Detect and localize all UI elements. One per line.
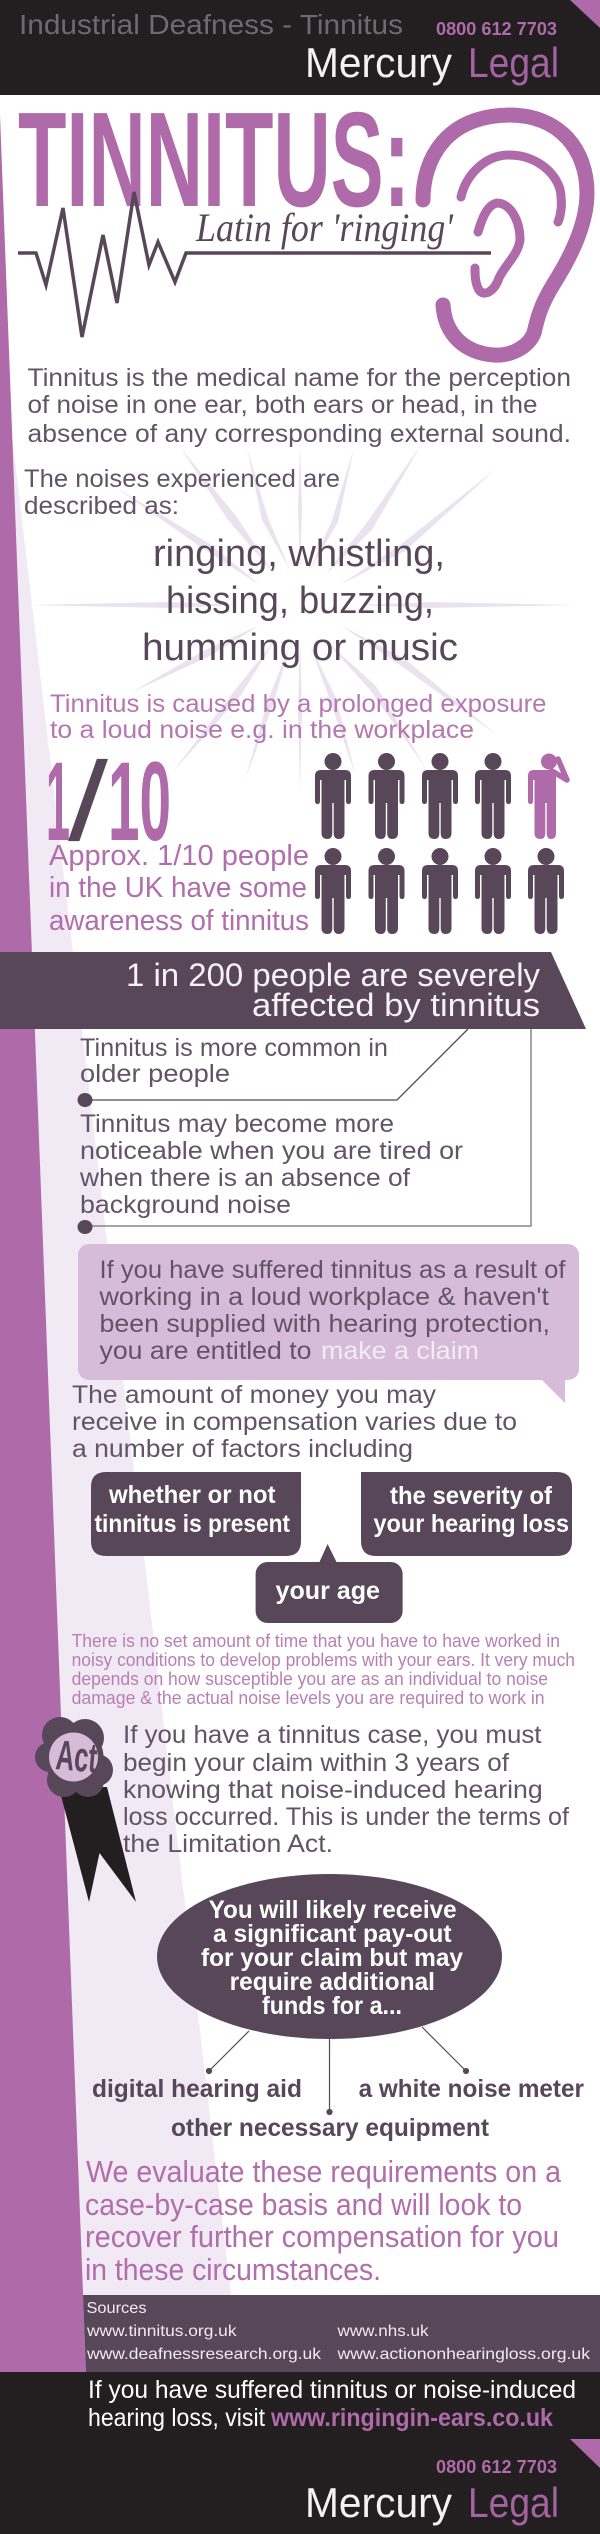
connector: age callout (78, 1029, 468, 1107)
statistic: 1/10: 1 (46, 739, 70, 864)
text block: limitation act: If you have a tinnitus case, you must (123, 1721, 542, 1749)
pictogram: ten people (315, 753, 567, 934)
text block: list of noises: hissing, buzzing, (166, 580, 434, 622)
subtitle: Latin for 'ringing' (195, 205, 454, 250)
text block: list of noises (142, 533, 458, 669)
icon: pulse line (18, 192, 491, 337)
panel: sources: www.tinnitus.org.uk (86, 2323, 238, 2340)
label: digital hearing aid: digital hearing aid (92, 2075, 302, 2103)
top header bar: 0800 612 7703 (436, 19, 557, 39)
text block: definition: absence of any corresponding external sound. (28, 420, 571, 448)
text block: compensation: a number of factors including (72, 1435, 413, 1463)
text block: older people (80, 1034, 388, 1088)
label: other equipment: other necessary equipment (171, 2114, 490, 2142)
speech bubble: make a claim: working in a loud workplace & haven't (98, 1283, 549, 1311)
text block: awareness: in the UK have some (49, 872, 307, 904)
text block: more noticeable (79, 1110, 463, 1219)
ellipse: significant pay-out: funds for a... (262, 1992, 402, 2020)
panel: sources: www.nhs.uk (336, 2323, 430, 2340)
label: white noise meter: a white noise meter (359, 2075, 584, 2103)
text block: list of noises: humming or music (142, 627, 458, 669)
starburst rays (29, 445, 578, 790)
text block: more noticeable: when there is an absence of (79, 1164, 410, 1192)
connector: noticeable callout (78, 1029, 531, 1234)
text block: no set time: damage & the actual noise levels you are required to work in (72, 1688, 545, 1708)
text block: no set time: There is no set amount of time that you have to have worked in (72, 1631, 560, 1651)
text block: case-by-case: case-by-case basis and will look to (85, 2187, 522, 2222)
text block: more noticeable: background noise (80, 1191, 291, 1219)
footer bar: 0800 612 7703 (436, 2457, 557, 2477)
footer bar: www.ringingin-ears.co.uk (270, 2404, 553, 2432)
ellipse: significant pay-out (157, 1874, 502, 2039)
icon: Act ribbon badge (35, 1717, 136, 1902)
ellipse: significant pay-out: You will likely receive (209, 1896, 457, 1924)
speech bubble: make a claim: make a claim (321, 1337, 479, 1365)
footer bar: hearing loss, visit (88, 2404, 265, 2432)
text block: more noticeable: noticeable when you are tired or (80, 1137, 463, 1165)
panel: sources (83, 2295, 600, 2372)
text block: case-by-case: recover further compensation for you (85, 2219, 559, 2254)
text block: case-by-case: in these circumstances. (85, 2252, 381, 2287)
text block: list of noises: ringing, whistling, (153, 533, 445, 575)
text block: no set time: noisy conditions to develop problems with your ears. It very much (72, 1650, 575, 1670)
speech bubble: make a claim: been supplied with hearing protection, (100, 1310, 550, 1338)
text block: compensation: receive in compensation varies due to (72, 1408, 517, 1436)
connector lines: equipment (206, 2027, 468, 2114)
text block: older people: Tinnitus is more common in (80, 1034, 388, 1062)
panel: sources: www.deafnessresearch.org.uk (86, 2346, 322, 2363)
text block: cause: to a loud noise e.g. in the workplace (50, 716, 474, 744)
top header bar: Mercury (305, 39, 452, 86)
text block: noises intro: The noises experienced are (24, 465, 340, 493)
factor box: severity: the severity of (390, 1482, 553, 1510)
factor box: severity (361, 1472, 572, 1556)
text block: definition: of noise in one ear, both ears or head, in the (28, 391, 538, 419)
top header bar (0, 0, 600, 95)
purple side band (0, 115, 86, 2372)
factor box: severity: your hearing loss (374, 1510, 569, 1538)
text block: limitation act: begin your claim within 3 years of (123, 1749, 509, 1777)
text block: compensation: The amount of money you may (72, 1381, 437, 1409)
statistic: 1/10 (46, 739, 171, 864)
panel: sources: www.actiononhearingloss.org.uk (336, 2346, 591, 2363)
factor box: tinnitus present (91, 1472, 301, 1556)
banner: 1 in 200: 1 in 200 people are severely (126, 957, 540, 993)
text block: case-by-case (85, 2154, 562, 2287)
text block: case-by-case: We evaluate these requirements on a (86, 2154, 562, 2189)
text block: no set time (72, 1631, 575, 1708)
factor box: age (256, 1544, 403, 1623)
text block: definition: Tinnitus is the medical name for the perception (28, 364, 571, 392)
text block: more noticeable: Tinnitus may become more (80, 1110, 394, 1138)
footer bar (0, 2372, 600, 2534)
top header bar: Legal (468, 39, 559, 86)
factor box: age: your age (276, 1577, 380, 1605)
banner: 1 in 200: affected by tinnitus (252, 987, 540, 1023)
banner: 1 in 200 (0, 952, 586, 1029)
text block: definition (28, 364, 571, 448)
text block: noises intro (24, 465, 340, 520)
top header bar: Industrial Deafness - Tinnitus (19, 9, 403, 40)
icon: ear (423, 115, 587, 355)
ellipse: significant pay-out: for your claim but may (201, 1944, 463, 1972)
text block: awareness: Approx. 1/10 people (49, 840, 309, 872)
ellipse: significant pay-out: a significant pay-out (213, 1920, 452, 1948)
panel: sources: Sources (86, 2300, 146, 2317)
factor box: tinnitus present: whether or not (108, 1481, 276, 1509)
statistic: 1/10: / (68, 739, 109, 864)
text block: limitation act: the Limitation Act. (123, 1830, 333, 1858)
text block: awareness (49, 840, 309, 937)
text block: older people: older people (80, 1060, 230, 1088)
text block: limitation act (123, 1721, 569, 1858)
text block: limitation act: loss occurred. This is under the terms of (123, 1803, 569, 1831)
speech bubble: make a claim (78, 1244, 579, 1403)
speech bubble: make a claim: you are entitled to (100, 1337, 312, 1365)
ellipse: significant pay-out: require additional (230, 1968, 435, 1996)
factor box: tinnitus present: tinnitus is present (94, 1510, 291, 1538)
icon: Act ribbon badge: Act (54, 1731, 99, 1782)
text block: compensation (72, 1381, 517, 1463)
statistic: 1/10: 10 (108, 739, 171, 864)
footer bar: Mercury (305, 2479, 452, 2526)
footer bar: If you have suffered tinnitus or noise-induced (88, 2376, 576, 2404)
text block: awareness: awareness of tinnitus (49, 905, 309, 937)
text block: cause: Tinnitus is caused by a prolonged exposure (50, 690, 546, 718)
footer bar: Legal (468, 2479, 559, 2526)
text block: cause (50, 690, 546, 744)
text block: noises intro: described as: (24, 492, 179, 520)
light side band (12, 435, 231, 2295)
text block: no set time: depends on how susceptible you are as an individual to noise (72, 1669, 548, 1689)
text block: limitation act: knowing that noise-induced hearing (123, 1776, 543, 1804)
speech bubble: make a claim: If you have suffered tinnitus as a result of (100, 1256, 566, 1284)
